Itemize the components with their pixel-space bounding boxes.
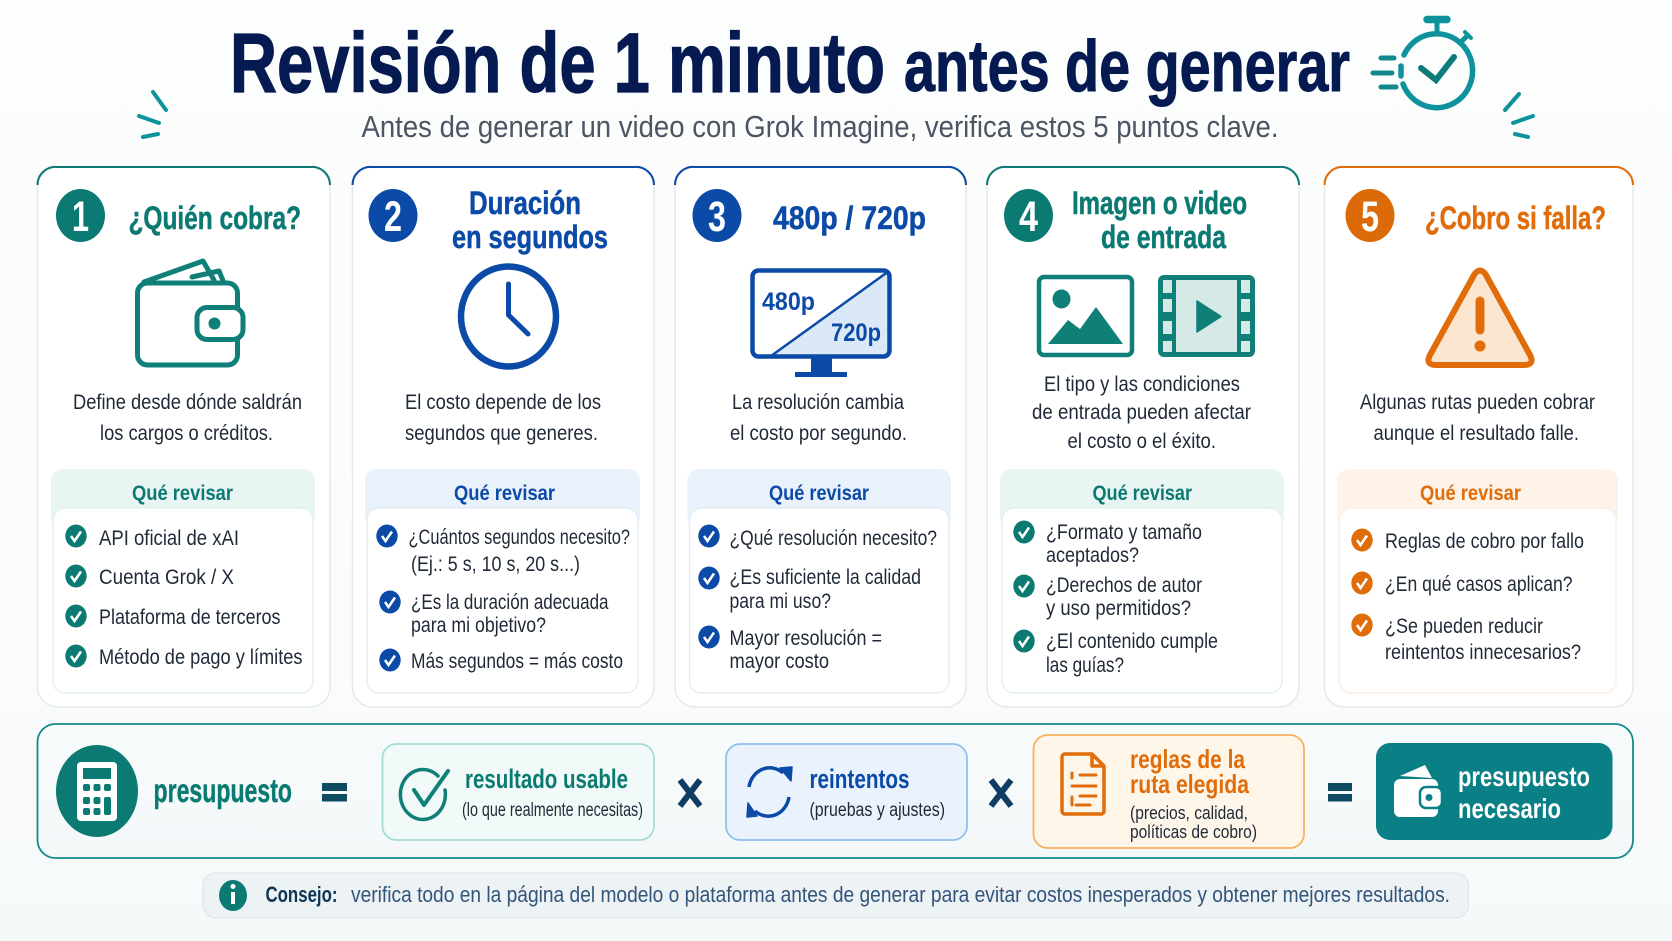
description: los cargos o créditos. xyxy=(100,421,273,445)
badge 4 xyxy=(1004,189,1053,242)
callout: consejo xyxy=(203,873,1468,918)
description: el costo o el éxito. xyxy=(1068,429,1216,453)
title: Revisión de 1 minuto xyxy=(230,16,885,110)
check items xyxy=(1013,520,1218,677)
icon: monitor: 720p xyxy=(831,319,881,347)
check items: ¿En qué casos aplican? xyxy=(1385,573,1572,596)
description: aunque el resultado falle. xyxy=(1374,421,1579,445)
badge 5: 5 xyxy=(1361,193,1379,241)
box: resultado usable: (lo que realmente necesitas) xyxy=(462,800,643,821)
icon: stopwatch xyxy=(1373,20,1473,108)
operator equals xyxy=(322,783,347,802)
check items: ¿Derechos de autor xyxy=(1046,574,1202,597)
check items: Más segundos = más costo xyxy=(411,650,623,673)
badge 1: 1 xyxy=(72,193,89,241)
box: presupuesto necesario: necesario xyxy=(1458,793,1561,824)
check items: API oficial de xAI xyxy=(99,527,239,550)
panel: card 2 xyxy=(352,167,654,707)
decorative sparks right xyxy=(1505,94,1533,137)
decorative sparks left xyxy=(139,92,166,137)
panel: card 1 xyxy=(37,167,330,707)
box: reintentos xyxy=(726,744,967,840)
operator times xyxy=(991,780,1011,806)
check items: Plataforma de terceros xyxy=(99,606,280,629)
operator equals xyxy=(1328,783,1352,802)
check items: ¿Qué resolución necesito? xyxy=(730,527,937,550)
badge 2: 2 xyxy=(384,193,402,241)
box: reglas de la ruta: reglas de la xyxy=(1130,744,1245,774)
icon: calculator xyxy=(56,745,138,837)
description: El costo depende de los xyxy=(405,390,601,414)
description: el costo por segundo. xyxy=(730,421,907,445)
check items: reintentos innecesarios? xyxy=(1385,641,1581,664)
check items: para mi uso? xyxy=(730,590,831,613)
heading: Quién cobra: ¿Quién cobra? xyxy=(128,200,301,236)
description xyxy=(405,390,601,445)
icon: film xyxy=(1158,275,1255,357)
box: reglas de la ruta: ruta elegida xyxy=(1130,769,1249,799)
heading: Imagen o video: Imagen o video xyxy=(1072,185,1247,221)
box: reglas de la ruta: (precios, calidad, xyxy=(1130,802,1248,823)
icon: monitor: 480p xyxy=(762,288,815,316)
checklist box: Qué revisar xyxy=(454,481,556,505)
box: reintentos: reintentos xyxy=(810,764,910,794)
checklist box: Qué revisar xyxy=(1092,481,1193,505)
box: presupuesto necesario xyxy=(1376,743,1612,840)
check items: las guías? xyxy=(1046,654,1124,677)
checklist box xyxy=(51,469,315,693)
check items: mayor costo xyxy=(730,650,829,673)
badge 2 xyxy=(368,189,418,242)
callout: consejo: verifica todo en la página del modelo o plataforma antes de generar para evitar costos inesperados y obtener mejores resultados. xyxy=(351,882,1450,907)
operator times xyxy=(680,780,700,806)
label: presupuesto: presupuesto xyxy=(154,772,292,809)
badge 3 xyxy=(692,189,742,242)
panel: budget formula xyxy=(38,724,1633,858)
description: Define desde dónde saldrán xyxy=(73,390,302,414)
callout: consejo: Consejo: xyxy=(266,882,338,907)
subtitle: Antes de generar un video con Grok Imagine, verifica estos 5 puntos clave. xyxy=(362,110,1278,144)
box: resultado usable: resultado usable xyxy=(465,764,628,794)
checklist box xyxy=(1000,469,1284,693)
check items: Método de pago y límites xyxy=(99,646,302,669)
panel: card 5 xyxy=(1324,167,1633,707)
check items: ¿El contenido cumple xyxy=(1046,630,1218,653)
check items xyxy=(376,524,630,673)
checklist box xyxy=(365,469,640,693)
checklist box xyxy=(688,469,951,693)
check items xyxy=(65,524,302,669)
heading: resolution: 480p / 720p xyxy=(773,200,926,236)
checklist box: Qué revisar xyxy=(769,481,870,505)
check items: ¿Es suficiente la calidad xyxy=(730,566,921,589)
check items: ¿Es la duración adecuada xyxy=(411,591,609,614)
check items: Reglas de cobro por fallo xyxy=(1385,530,1584,553)
description xyxy=(730,390,907,445)
icon: image xyxy=(1039,277,1132,355)
checklist box: Qué revisar xyxy=(132,481,234,505)
checklist box xyxy=(1337,469,1618,693)
panel: card 3 xyxy=(675,167,966,707)
check items: Cuenta Grok / X xyxy=(99,566,234,589)
description xyxy=(1032,372,1251,453)
check items xyxy=(698,524,937,673)
check items: ¿Cuántos segundos necesito? xyxy=(408,526,630,549)
box: presupuesto necesario: presupuesto xyxy=(1458,761,1590,792)
check items: Mayor resolución = xyxy=(730,627,882,650)
check items: ¿Se pueden reducir xyxy=(1385,615,1543,638)
badge 4: 4 xyxy=(1019,193,1038,241)
check items: (Ej.: 5 s, 10 s, 20 s...) xyxy=(411,553,580,576)
icon: warning xyxy=(1428,270,1532,365)
box: reintentos: (pruebas y ajustes) xyxy=(810,800,945,821)
badge 5 xyxy=(1346,189,1394,242)
description: Algunas rutas pueden cobrar xyxy=(1360,390,1595,414)
description xyxy=(1360,390,1595,445)
icon: clock xyxy=(461,266,556,366)
check items: para mi objetivo? xyxy=(411,614,546,637)
description: El tipo y las condiciones xyxy=(1044,372,1240,396)
heading: Cobro si falla: ¿Cobro si falla? xyxy=(1425,200,1606,236)
check items xyxy=(1351,528,1584,664)
panel: card 4 xyxy=(987,167,1299,707)
badge 3: 3 xyxy=(708,193,726,241)
icon: wallet xyxy=(138,261,243,365)
check items: y uso permitidos? xyxy=(1046,597,1191,620)
badge 1 xyxy=(56,189,105,242)
icon: monitor xyxy=(752,270,890,377)
title: antes de generar xyxy=(904,27,1350,107)
box: reglas de la ruta xyxy=(1034,735,1304,848)
box: resultado usable xyxy=(382,744,654,840)
heading: Duración en segundos: en segundos xyxy=(452,219,608,255)
icon: info xyxy=(219,880,247,911)
box: reglas de la ruta: políticas de cobro) xyxy=(1130,821,1257,842)
description: La resolución cambia xyxy=(732,390,904,414)
description: de entrada pueden afectar xyxy=(1032,400,1251,424)
check items: aceptados? xyxy=(1046,544,1139,567)
heading: Duración en segundos xyxy=(452,185,608,255)
check items: ¿Formato y tamaño xyxy=(1046,521,1202,544)
description: segundos que generes. xyxy=(405,421,598,445)
heading: Imagen o video: de entrada xyxy=(1101,219,1227,255)
heading: Imagen o video xyxy=(1072,185,1247,255)
checklist box: Qué revisar xyxy=(1420,481,1522,505)
description xyxy=(73,390,302,445)
heading: Duración en segundos: Duración xyxy=(469,185,581,221)
